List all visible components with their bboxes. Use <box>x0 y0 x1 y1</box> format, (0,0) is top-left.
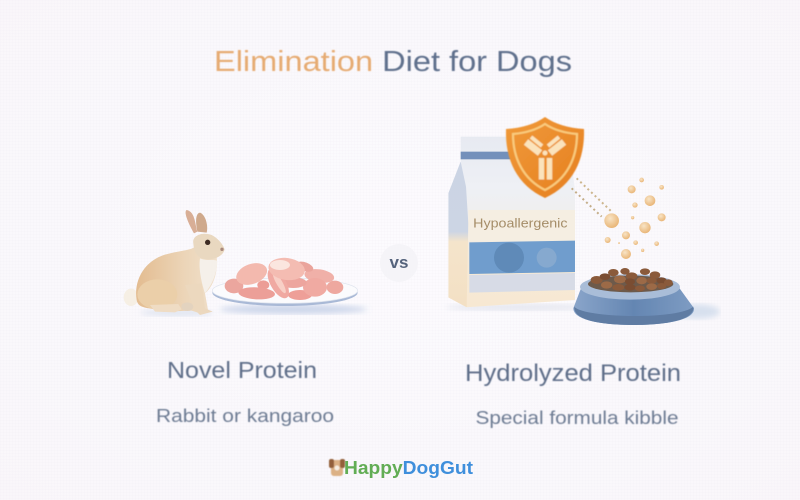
illustration: rabbit <box>124 210 225 316</box>
eye <box>205 240 210 245</box>
icon: dog <box>329 459 345 476</box>
ears <box>186 210 197 233</box>
right heading: Hydrolyzed Protein <box>465 360 681 387</box>
left subtext: Rabbit or kangaroo <box>156 406 334 426</box>
title: Elimination Diet for Dogs <box>214 46 572 78</box>
right subtext: Special formula kibble <box>476 408 678 428</box>
dotted beams <box>577 178 612 212</box>
particles <box>572 178 666 259</box>
tail <box>124 289 138 306</box>
front leg <box>185 283 213 315</box>
illustration: plate of meat <box>212 256 367 314</box>
chest <box>200 258 217 293</box>
bag label band <box>468 210 575 241</box>
vs badge <box>380 244 418 282</box>
kibble <box>591 268 673 291</box>
vs badge: vs <box>390 253 408 272</box>
illustration: hypoallergenic food bag <box>447 137 587 311</box>
bag blue panel <box>469 241 575 274</box>
bag grey strip <box>469 273 575 293</box>
bag top band <box>461 152 511 159</box>
plate <box>212 279 358 306</box>
body <box>136 247 217 313</box>
hind foot <box>150 304 182 312</box>
nose <box>220 248 224 251</box>
left heading: Novel Protein <box>167 357 317 383</box>
brand logo: HappyDogGut <box>344 458 473 478</box>
head <box>193 234 225 259</box>
bag label text: Hypoallergenic <box>473 217 567 231</box>
antibody glyph <box>526 137 564 180</box>
bag side gusset <box>448 162 468 307</box>
food bowl <box>573 268 720 325</box>
icon: shield with antibody <box>506 117 584 198</box>
meat slices <box>225 256 343 302</box>
haunch <box>137 279 177 309</box>
